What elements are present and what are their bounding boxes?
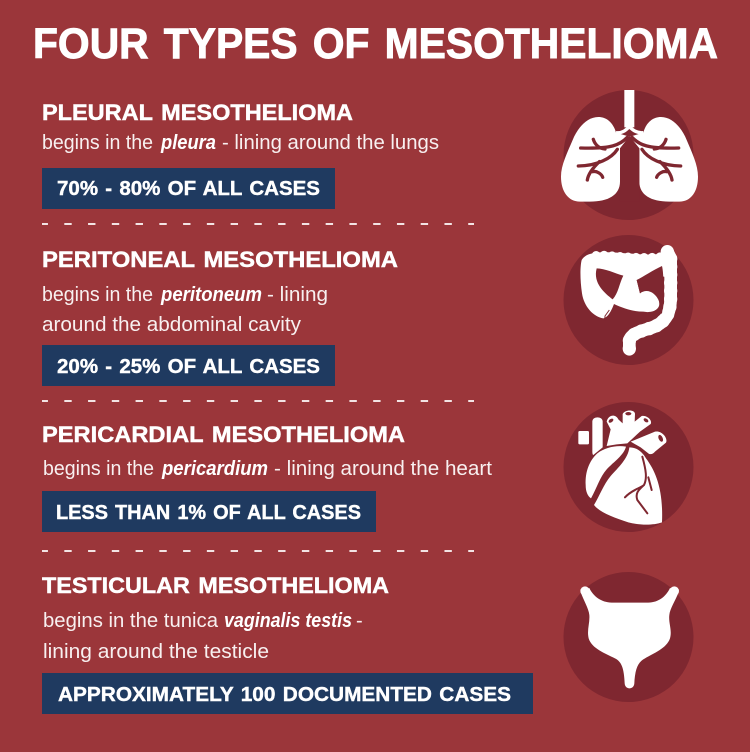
description: pericardial: begins in the: [43, 458, 154, 480]
description: testicular: begins in the tunica: [43, 610, 219, 632]
icon: heart: [564, 402, 694, 532]
banner: 70% - 80% of all cases: [42, 168, 335, 209]
description: testicular: vaginalis testis: [224, 610, 352, 632]
description: testicular: lining around the testicle: [43, 641, 269, 663]
panel: pleural mesothelioma: [42, 100, 439, 209]
description: pericardial: pericardium: [161, 458, 268, 480]
description: pleural: [42, 132, 439, 154]
panel: pericardial mesothelioma: [42, 422, 492, 532]
banner: approximately 100 documented cases: [42, 673, 533, 714]
panel: peritoneal mesothelioma: [42, 247, 398, 386]
title: FOUR TYPES OF MESOTHELIOMA: [33, 20, 718, 68]
banner: approximately 100 documented cases: APPROXIMATELY 100 DOCUMENTED CASES: [58, 684, 511, 706]
icon: lungs: [561, 90, 698, 220]
description: peritoneal: peritoneum: [160, 284, 262, 306]
description: pleural: pleura: [160, 132, 216, 154]
description: pleural: - lining around the lungs: [222, 132, 439, 154]
icon: bladder: [564, 572, 694, 702]
heading: pleural: PLEURAL MESOTHELIOMA: [42, 100, 353, 125]
description: peritoneal: - lining: [267, 284, 328, 306]
heading: peritoneal: PERITONEAL MESOTHELIOMA: [42, 247, 398, 272]
description: pericardial: [43, 458, 492, 480]
description: pleural: begins in the: [42, 132, 153, 154]
description: testicular: -: [356, 610, 363, 632]
description: pericardial: - lining around the heart: [274, 458, 492, 480]
banner: 70% - 80% of all cases: 70% - 80% OF ALL CASES: [57, 178, 320, 200]
description: testicular: [43, 610, 363, 663]
heading: testicular: TESTICULAR MESOTHELIOMA: [42, 573, 389, 598]
description: peritoneal: around the abdominal cavity: [42, 314, 301, 336]
description: peritoneal: [42, 284, 328, 336]
heading: pericardial: PERICARDIAL MESOTHELIOMA: [42, 422, 405, 447]
banner: 20% - 25% of all cases: 20% - 25% OF ALL CASES: [57, 356, 320, 378]
banner: 20% - 25% of all cases: [42, 345, 335, 386]
panel: testicular mesothelioma: [42, 573, 533, 714]
description: peritoneal: begins in the: [42, 284, 153, 306]
banner: less than 1% of all cases: LESS THAN 1% OF ALL CASES: [56, 502, 361, 524]
icon: intestines: [564, 235, 694, 365]
banner: less than 1% of all cases: [42, 491, 376, 532]
